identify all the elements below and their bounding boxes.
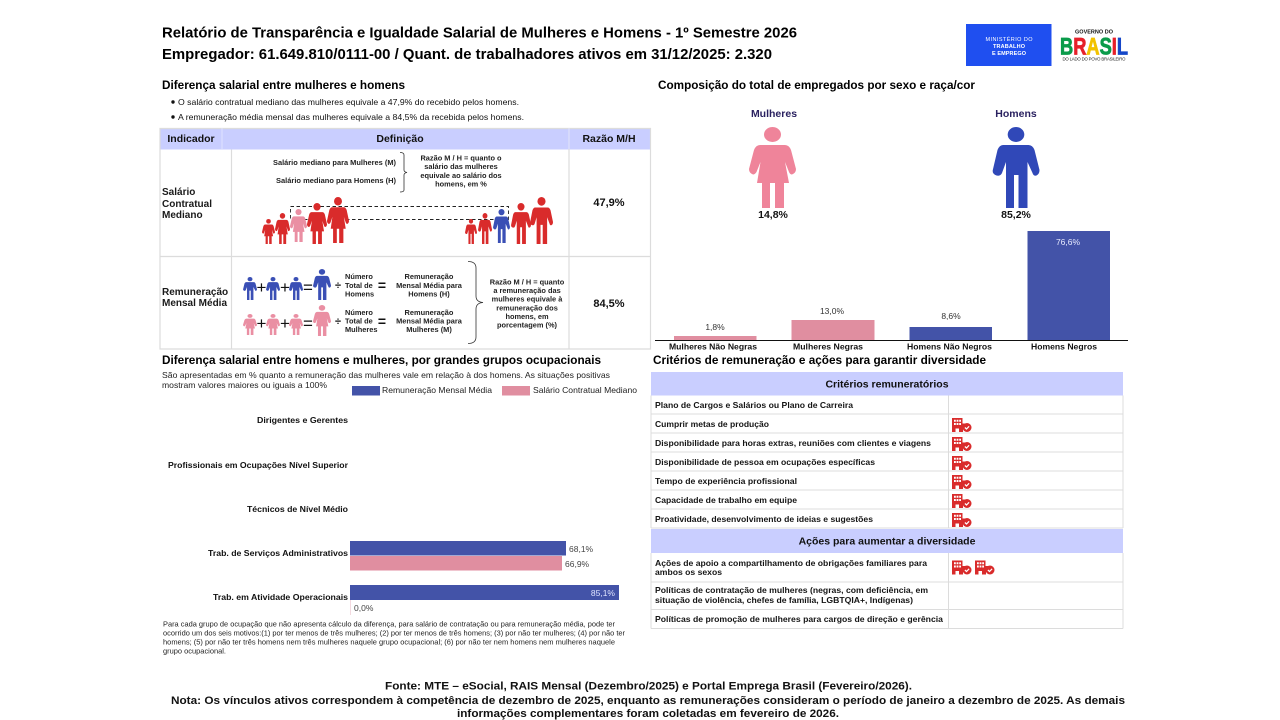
panel: critérios remuneratórios bbox=[651, 372, 1123, 528]
panel: ações para diversidade: ambos os sexos bbox=[655, 567, 722, 577]
panel: tabela de indicadores bbox=[160, 128, 650, 349]
footer: fonte e nota: informações complementares foram coletadas em fevereiro de 2026. bbox=[457, 708, 839, 720]
title: Empregador: 61.649.810/0111-00 / Quant. de trabalhadores ativos em 31/12/2025: 2.320 bbox=[162, 47, 772, 63]
bars: atividade operacional: 0,0% bbox=[354, 603, 374, 613]
bar: homens negros: 76,6% bbox=[1056, 237, 1080, 247]
bar: mulheres negras bbox=[792, 306, 874, 352]
row: remuneração mensal média: Mensal Média bbox=[162, 298, 227, 309]
icon: homens ordenados por salário bbox=[465, 197, 553, 244]
logo: Governo do Brasil: BRASIL bbox=[1060, 34, 1128, 60]
row: salário contratual mediano: salário das mulheres bbox=[424, 162, 498, 171]
title: Relatório de Transparência e Igualdade Salarial de Mulheres e Homens - 1º Semestre 2026 bbox=[162, 26, 797, 42]
row: remuneração mensal média: Mensal Média para bbox=[396, 281, 463, 290]
icon: mulheres ordenadas por salário bbox=[262, 197, 349, 244]
panel: critérios remuneratórios: Plano de Cargos e Salários ou Plano de Carreira bbox=[655, 400, 853, 410]
row: remuneração mensal média: Número bbox=[345, 272, 373, 281]
bar chart: grupos ocupacionais: Trab. de Serviços Administrativos bbox=[208, 548, 348, 558]
icon: soma de homens bbox=[243, 269, 331, 300]
panel: ações para diversidade: situação de violência, chefes de família, LGBTQIA+, Indígenas) bbox=[655, 595, 913, 605]
bars: serviços administrativos bbox=[350, 541, 594, 570]
panel: critérios remuneratórios: Proatividade, desenvolvimento de ideias e sugestões bbox=[655, 514, 873, 524]
footnote: Para cada grupo de ocupação que não apresenta cálculo da diferença, para salário de contratação ou para remuneração média, pode ter bbox=[163, 620, 616, 628]
table header: Indicador bbox=[167, 133, 215, 145]
row: remuneração mensal média: Mensal Média para bbox=[396, 316, 463, 326]
panel: critérios remuneratórios: Disponibilidade para horas extras, reuniões com clientes e viagens bbox=[655, 438, 931, 448]
logo: Ministério do Trabalho e Emprego: MINISTÉRIO DO bbox=[986, 36, 1033, 43]
title bbox=[162, 26, 797, 63]
legend bbox=[352, 385, 637, 396]
row: salário contratual mediano: 47,9% bbox=[593, 197, 625, 209]
panel: ações para diversidade: Ações de apoio a compartilhamento de obrigações familiares para bbox=[655, 558, 927, 568]
bar: mulheres não negras: Mulheres Não Negras bbox=[669, 342, 757, 352]
row: remuneração mensal média: ÷ bbox=[335, 280, 341, 292]
icon: soma de homens: = bbox=[303, 278, 313, 297]
panel: ações para diversidade: Políticas de promoção de mulheres para cargos de direção e gerência bbox=[655, 614, 943, 624]
footer: fonte e nota: Nota: Os vínculos ativos correspondem à competência de dezembro de 2025, enquanto as remunerações consideram o período de janeiro a dezembro de 2025. As demais bbox=[171, 695, 1125, 707]
row: salário contratual mediano: Salário mediano para Mulheres (M) bbox=[273, 158, 397, 167]
icon: soma de mulheres: + bbox=[280, 314, 290, 333]
panel: ações para diversidade: Políticas de contratação de mulheres (negras, com deficiência, em bbox=[655, 585, 928, 595]
row: remuneração mensal média: Remuneração bbox=[405, 308, 454, 317]
row: remuneração mensal média: mulheres equivale à bbox=[492, 294, 563, 304]
bar chart: grupos ocupacionais: Dirigentes e Gerentes bbox=[257, 415, 348, 425]
pictogram: homens: Homens bbox=[995, 108, 1037, 120]
bar: mulheres negras: 13,0% bbox=[820, 306, 844, 316]
bar: homens não negros: Homens Não Negros bbox=[907, 342, 992, 352]
row: remuneração mensal média: = bbox=[378, 277, 386, 293]
text: explicação do gráfico bbox=[162, 370, 610, 390]
icons: empresa com ações bbox=[952, 560, 994, 574]
bar: mulheres negras: Mulheres Negras bbox=[793, 342, 863, 352]
text: explicação do gráfico: mostram valores maiores ou iguais a 100% bbox=[162, 380, 327, 390]
panel: ações para diversidade: Ações para aumentar a diversidade bbox=[799, 536, 976, 548]
heading: composição: Composição do total de empregados por sexo e raça/cor bbox=[658, 79, 975, 92]
legend: Salário Contratual Mediano bbox=[533, 385, 637, 395]
row: remuneração mensal média: homens, em bbox=[505, 312, 549, 321]
logo: Ministério do Trabalho e Emprego bbox=[966, 24, 1052, 66]
bar chart: composição por sexo e raça bbox=[655, 231, 1128, 352]
bar: homens negros bbox=[1028, 231, 1110, 352]
row: remuneração mensal média: Remuneração bbox=[162, 287, 228, 298]
logo: Ministério do Trabalho e Emprego: TRABALHO bbox=[993, 44, 1026, 50]
bars: atividade operacional: 85,1% bbox=[591, 588, 615, 598]
row: salário contratual mediano: Contratual bbox=[162, 199, 212, 210]
panel: critérios remuneratórios: Disponibilidade de pessoa em ocupações específicas bbox=[655, 457, 875, 467]
row: remuneração mensal média: ÷ bbox=[335, 316, 341, 328]
pictogram: homens: 85,2% bbox=[1001, 209, 1032, 221]
row: salário contratual mediano: homens, em % bbox=[435, 180, 487, 188]
pictogram: mulheres bbox=[749, 108, 797, 221]
row: remuneração mensal média bbox=[162, 262, 625, 344]
row: salário contratual mediano: Salário bbox=[162, 187, 195, 198]
pictogram: mulheres: 14,8% bbox=[758, 209, 789, 221]
footnote: grupo ocupacional. bbox=[163, 648, 226, 656]
row: remuneração mensal média: remuneração dos bbox=[496, 304, 558, 312]
row: salário contratual mediano bbox=[162, 152, 625, 244]
row: remuneração mensal média: Remuneração bbox=[405, 272, 454, 281]
footer: fonte e nota bbox=[171, 680, 1125, 720]
icon: soma de homens: + bbox=[257, 278, 267, 297]
heading: critérios: Critérios de remuneração e ações para garantir diversidade bbox=[653, 354, 986, 367]
legend: Remuneração Mensal Média bbox=[382, 385, 492, 395]
row: remuneração mensal média: Total de bbox=[345, 316, 373, 326]
row: salário contratual mediano: Salário mediano para Homens (H) bbox=[276, 176, 397, 185]
row: remuneração mensal média: Número bbox=[345, 308, 373, 317]
heading: grupos ocupacionais: Diferença salarial entre homens e mulheres, por grandes grupos ocupacionais bbox=[162, 354, 601, 367]
summary bullets bbox=[171, 97, 524, 122]
panel: critérios remuneratórios: Cumprir metas de produção bbox=[655, 419, 769, 429]
table header bbox=[167, 133, 636, 145]
footnote: ocorrido um dos seis motivos:(1) por ter menos de três mulheres; (2) por ter menos de três homens; (3) por não ter mulheres; (4) por não ter bbox=[163, 630, 626, 638]
logo: Governo do Brasil: GOVERNO DO bbox=[1075, 30, 1114, 36]
heading: diferença salarial: Diferença salarial entre mulheres e homens bbox=[162, 79, 405, 92]
summary bullets: A remuneração média mensal das mulheres equivale a 84,5% da recebida pelos homens. bbox=[178, 112, 524, 122]
row: remuneração mensal média: a remuneração das bbox=[493, 286, 561, 295]
bar chart: grupos ocupacionais: Trab. em Atividade Operacionais bbox=[213, 592, 348, 602]
bar: homens não negros: 8,6% bbox=[941, 311, 961, 321]
icon: soma de mulheres bbox=[243, 305, 331, 336]
row: salário contratual mediano: Razão M / H = quanto o bbox=[420, 154, 502, 162]
panel: critérios remuneratórios: Tempo de experiência profissional bbox=[655, 476, 797, 486]
pictogram: mulheres: Mulheres bbox=[751, 108, 797, 120]
table header: Definição bbox=[376, 133, 424, 145]
row: remuneração mensal média: Mulheres bbox=[345, 325, 377, 334]
bar: homens negros: Homens Negros bbox=[1031, 342, 1097, 352]
row: remuneração mensal média: Total de bbox=[345, 281, 373, 290]
row: salário contratual mediano: equivale ao salário dos bbox=[420, 171, 502, 180]
bar: mulheres não negras bbox=[669, 322, 757, 352]
bar: mulheres não negras: 1,8% bbox=[705, 322, 725, 332]
row: remuneração mensal média: Razão M / H = quanto bbox=[490, 278, 565, 286]
row: remuneração mensal média: Mulheres (M) bbox=[406, 325, 452, 334]
row: salário contratual mediano: Mediano bbox=[162, 210, 203, 221]
summary bullets: O salário contratual mediano das mulheres equivale a 47,9% do recebido pelos homens. bbox=[178, 97, 519, 107]
panel: critérios remuneratórios: Critérios remuneratórios bbox=[825, 378, 949, 390]
logo: Governo do Brasil: DO LADO DO POVO BRASILEIRO bbox=[1062, 56, 1126, 62]
pictogram: homens bbox=[993, 108, 1040, 221]
table header: Razão M/H bbox=[582, 133, 636, 145]
bar chart: grupos ocupacionais bbox=[168, 415, 619, 615]
footnote bbox=[163, 620, 626, 656]
footer: fonte e nota: Fonte: MTE – eSocial, RAIS Mensal (Dezembro/2025) e Portal Emprega Brasil (Fevereiro/2026). bbox=[385, 680, 912, 692]
icon: soma de homens: + bbox=[280, 278, 290, 297]
footnote: homens; (5) por não ter três homens nem três mulheres naquele grupo ocupacional; (6) por não ter nem homens nem mulheres naquele bbox=[163, 638, 615, 646]
panel: ações para diversidade bbox=[651, 529, 1123, 628]
bar chart: grupos ocupacionais: Profissionais em Ocupações Nível Superior bbox=[168, 460, 349, 470]
bars: serviços administrativos: 66,9% bbox=[565, 559, 590, 569]
bar: homens não negros bbox=[907, 311, 992, 352]
logo: Ministério do Trabalho e Emprego: E EMPREGO bbox=[992, 51, 1027, 57]
row: remuneração mensal média: Homens bbox=[345, 290, 374, 298]
row: remuneração mensal média: Homens (H) bbox=[408, 290, 450, 298]
text: explicação do gráfico: São apresentadas em % quanto a remuneração das mulheres vale em relação à dos homens. As situações positivas bbox=[162, 370, 610, 380]
icon: soma de mulheres: = bbox=[303, 314, 313, 333]
row: remuneração mensal média: porcentagem (%) bbox=[497, 320, 558, 330]
bars: atividade operacional bbox=[350, 585, 619, 615]
row: remuneração mensal média: = bbox=[378, 313, 386, 329]
bars: serviços administrativos: 68,1% bbox=[569, 544, 594, 554]
icon: soma de mulheres: + bbox=[257, 314, 267, 333]
row: remuneração mensal média: 84,5% bbox=[593, 298, 625, 310]
icons: empresa com critério bbox=[952, 418, 972, 527]
panel: critérios remuneratórios: Capacidade de trabalho em equipe bbox=[655, 495, 797, 505]
bar chart: grupos ocupacionais: Técnicos de Nível Médio bbox=[247, 504, 348, 514]
